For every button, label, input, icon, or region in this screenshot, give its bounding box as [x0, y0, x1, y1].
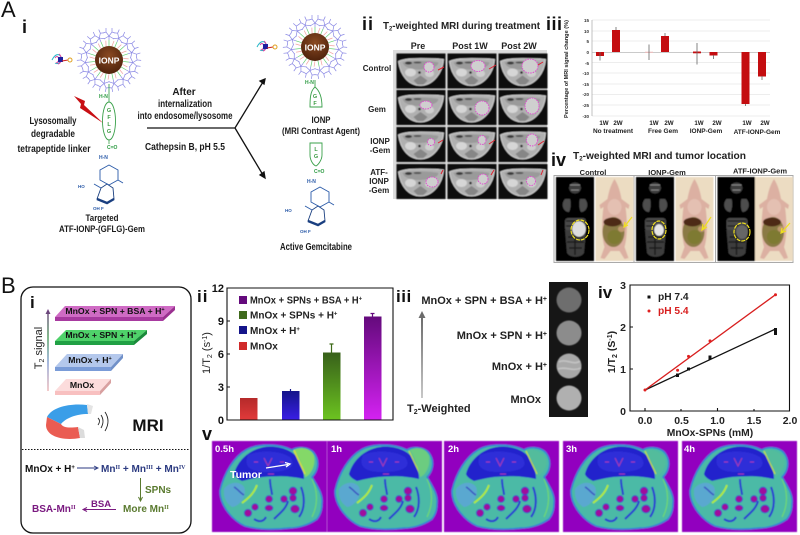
panel A-iii: signal change bar chart [546, 14, 781, 136]
y axis title: (s [201, 341, 213, 354]
label i: i [30, 293, 35, 312]
row labels: IONP [369, 177, 389, 186]
sample labels [421, 295, 547, 406]
image: 3h: 3h [566, 444, 577, 455]
Mn species: II [115, 465, 121, 471]
image frames [554, 175, 793, 262]
layer: H+ [55, 354, 123, 371]
tumor callout [230, 462, 290, 481]
label i: i [22, 17, 27, 37]
x labels groups: ATF-IONP-Gem [734, 129, 781, 136]
arrow: T2-weighted [418, 311, 426, 398]
error bars [600, 27, 762, 106]
tetrapeptide linker: L [107, 122, 111, 128]
x labels weeks: 1W [599, 120, 609, 127]
label v: v [202, 424, 212, 444]
y tick labels: 5 [586, 39, 589, 44]
legend [648, 292, 689, 317]
legend: + [334, 312, 338, 318]
panel box [21, 287, 191, 533]
image: 1h: 1h [331, 444, 342, 455]
column headers: Pre [411, 41, 425, 51]
conjugate caption: Targeted [86, 213, 119, 224]
y ticks: 12 [212, 283, 224, 295]
y tick labels: -30 [582, 114, 589, 119]
tetrapeptide linker: H-N [99, 94, 108, 100]
arrow: T2 signal [46, 309, 50, 391]
layer: H+: MnOx + H [68, 355, 109, 365]
layer: BSA: MnOx + SPN + BSA + H [65, 306, 161, 316]
heading: 2 [579, 156, 583, 162]
icon: active gemcitabine: OH F [300, 229, 311, 234]
heading: -weighted MRI during treatment [392, 21, 541, 32]
arrow label: T [407, 403, 414, 415]
y axis title: -1 [607, 334, 614, 341]
y ticks: 9 [218, 316, 224, 328]
y axis title: 2 [207, 354, 214, 358]
icon: magnet [46, 404, 93, 439]
image: 1h [327, 441, 442, 532]
y tick labels: -15 [582, 82, 589, 87]
BSA-Mn II: BSA-Mn [32, 504, 71, 515]
icon: signal waves [98, 412, 108, 431]
y ticks: 3 [620, 280, 626, 292]
layer: SPN: MnOx + SPN + H [65, 330, 133, 340]
GF fragment: H-N [305, 80, 314, 86]
label ii: ii [197, 287, 208, 306]
row labels: Control [363, 64, 391, 73]
arrow label: 2 [414, 409, 418, 416]
y ticks [620, 280, 626, 418]
series: pH 7.4 [645, 328, 777, 390]
column headers [411, 41, 537, 51]
icon: gemcitabine left: HO [78, 184, 85, 189]
image: 4h [682, 441, 797, 532]
group labels: Control [580, 168, 606, 177]
group labels: ATF-IONP-Gem [733, 166, 787, 176]
tetrapeptide linker: G [107, 108, 111, 114]
panel B-iv: relaxivity line plot [598, 280, 797, 439]
row labels: ATF- [370, 168, 388, 177]
row labels [363, 64, 391, 195]
image: 4h: 4h [684, 444, 695, 455]
layer: SPN [55, 330, 147, 345]
grid and axis [592, 20, 770, 116]
sample labels: MnOx [510, 394, 542, 406]
BSA label: BSA [91, 499, 111, 510]
equation: MnOx to Mn ions: MnOx + H [25, 464, 71, 475]
heading: T [383, 21, 389, 32]
Mn species: + Mn [153, 464, 179, 475]
x labels weeks: 2W [712, 120, 722, 127]
legend: MnOx [250, 342, 278, 352]
sample labels: MnOx + SPN + BSA + H [421, 295, 543, 307]
image: 2h [444, 441, 559, 532]
image: 0.5h [212, 441, 327, 532]
x labels weeks: 2W [613, 120, 623, 127]
heading: T [573, 151, 579, 162]
icon: active gemcitabine: H-N [307, 179, 316, 185]
Mn species: Mn [101, 464, 115, 475]
label iv: iv [551, 150, 566, 170]
icon: IONP dendrimer right: IONP [305, 42, 326, 52]
x ticks: 2.0 [783, 415, 797, 427]
y ticks: 3 [218, 382, 224, 394]
panel B-ii: relaxation rate bar chart [197, 283, 393, 427]
x labels weeks: 2W [760, 120, 770, 127]
Mn species: III [146, 465, 154, 471]
column headers: Post 2W [501, 41, 537, 51]
series: pH 5.4 [644, 293, 777, 392]
LG fragment [310, 143, 325, 175]
x labels weeks: 1W [694, 120, 704, 127]
reaction conditions text: Cathepsin B, pH 5.5 [145, 141, 225, 153]
legend [239, 296, 362, 352]
y axis title: -1 [202, 336, 209, 342]
reaction conditions text: into endosome/lysosome [138, 111, 233, 122]
y axis title: Percentage of MRI signal change (%) [564, 20, 570, 118]
layer: MnOx: MnOx [70, 380, 94, 390]
column headers: Post 1W [452, 41, 488, 51]
x ticks: 0.0 [638, 415, 652, 427]
GF fragment: F [313, 101, 317, 107]
conjugate caption: ATF-IONP-(GFLG)-Gem [59, 224, 145, 235]
icon: cleavage lightning [74, 96, 103, 123]
icon: IONP dendrimer left [77, 28, 141, 93]
sample labels: + [543, 362, 547, 369]
row labels: -Gem [370, 146, 390, 155]
x labels groups: Free Gem [648, 128, 678, 135]
phantom image [549, 282, 588, 417]
group labels: IONP-Gem [648, 168, 686, 177]
legend: MnOx + SPNs + H [250, 310, 334, 322]
y tick labels: -10 [582, 71, 589, 76]
row labels: IONP [370, 137, 390, 146]
GF fragment: G [313, 94, 317, 100]
arrow: to Mn ions [77, 466, 98, 470]
y axis title: ) [606, 331, 618, 334]
tetrapeptide linker: F [107, 115, 111, 121]
y tick labels [582, 18, 589, 119]
More Mn II: More Mn [123, 504, 164, 515]
T2 signal axis label: 2 [39, 358, 46, 362]
icon: ATF protein left [52, 54, 72, 64]
y ticks: 1 [620, 364, 626, 376]
y axis title: 1/T [201, 358, 213, 374]
y ticks: 6 [218, 349, 224, 361]
x labels groups: No treatment [593, 128, 634, 135]
panel B-iii: T2-weighted phantom [396, 282, 588, 417]
y ticks: 2 [620, 322, 626, 334]
layer: MnOx [55, 379, 111, 395]
LG fragment: G [314, 154, 318, 160]
sample labels: MnOx + SPN + H [457, 330, 543, 342]
LG fragment: C=O [314, 169, 325, 175]
x labels weeks: 1W [742, 120, 752, 127]
label iii: iii [546, 14, 563, 34]
layer: SPN: + [133, 331, 137, 337]
y tick labels: -20 [582, 92, 589, 97]
legend: + [296, 327, 300, 333]
tumor markers [571, 217, 790, 241]
y tick labels: 10 [584, 29, 589, 34]
icon: active gemcitabine: HO [285, 208, 292, 213]
bars [596, 30, 766, 104]
equation: MnOx to Mn ions: + [71, 465, 75, 471]
x labels groups: IONP-Gem [690, 128, 722, 135]
image: 3h [563, 441, 678, 532]
row labels: -Gem [369, 186, 389, 195]
linker caption: Lysosomally [30, 116, 77, 127]
GF fragment [305, 80, 322, 107]
MRI grid [393, 50, 548, 199]
x labels weeks [599, 120, 770, 127]
sample labels: MnOx + H [492, 361, 543, 373]
layer: H+: + [109, 356, 112, 362]
sample labels: + [543, 331, 547, 338]
label ii: ii [362, 14, 374, 34]
x ticks [638, 415, 797, 427]
arrow: forked reaction [147, 79, 265, 178]
label iv: iv [598, 283, 613, 302]
Mn species: IV [179, 465, 186, 471]
legend: + [359, 296, 362, 302]
x labels weeks: 1W [649, 120, 659, 127]
legend: MnOx + H [250, 326, 296, 337]
LG fragment: L [314, 147, 318, 153]
x labels groups [593, 128, 781, 136]
image: 2h: 2h [448, 444, 459, 455]
panel A-i: cleavage scheme [18, 15, 360, 253]
x axis title: MnOx-SPNs (mM) [667, 428, 753, 439]
y ticks: 0 [620, 406, 626, 418]
sample labels: + [543, 296, 547, 303]
legend: pH 7.4 [658, 292, 689, 303]
reaction conditions text: internalization [158, 99, 212, 110]
row labels: Gem [368, 105, 386, 114]
Mn species: + Mn [120, 464, 146, 475]
IONP caption: (MRI Contrast Agent) [282, 126, 360, 137]
y ticks: 0 [218, 415, 224, 427]
panel: B label: B [1, 273, 16, 298]
icon: IONP dendrimer right [283, 15, 347, 80]
T2 signal axis label: T [33, 362, 45, 369]
y tick labels: 15 [584, 18, 589, 23]
tetrapeptide linker: C=O [107, 145, 118, 151]
heading: 2 [389, 26, 393, 32]
T2 signal axis label: signal [33, 327, 45, 359]
y tick labels: -5 [585, 61, 589, 66]
More Mn II: II [164, 505, 169, 511]
bars [240, 314, 382, 420]
tumor callout: Tumor [230, 469, 262, 481]
icon: IONP dendrimer left: IONP [99, 56, 120, 66]
icon: gemcitabine left: OH F [93, 206, 104, 211]
BSA-Mn II: II [71, 505, 76, 511]
label iii: iii [396, 287, 412, 306]
arrow: SPNs [138, 478, 142, 501]
icon: gemcitabine left: H-N [99, 155, 108, 161]
panel A-iv: MRI and tumor location [551, 150, 793, 262]
tetrapeptide linker: G [107, 129, 111, 135]
plot frame [630, 285, 790, 411]
tetrapeptide linker [99, 84, 118, 151]
x ticks: 0.5 [674, 415, 689, 427]
reaction conditions text: After [172, 87, 196, 98]
arrow: BSA [83, 508, 116, 512]
linker caption: degradable [31, 129, 75, 140]
panel B-v: time-course MRI [202, 424, 797, 532]
linker caption: tetrapeptide linker [18, 144, 91, 155]
icon: ATF protein right [257, 41, 277, 51]
y axis title: (S [606, 341, 618, 354]
SPNs label: SPNs [145, 485, 172, 496]
x labels weeks: 2W [664, 120, 674, 127]
IONP caption: IONP [312, 115, 331, 126]
MRI label: MRI [132, 416, 164, 435]
active gemcitabine caption: Active Gemcitabine [280, 242, 352, 253]
legend: pH 5.4 [658, 306, 689, 317]
arrow label: -Weighted [418, 403, 471, 415]
chart frame [227, 288, 393, 420]
layer: BSA [55, 306, 175, 321]
y axis title: 2 [612, 354, 619, 358]
y tick labels: 0 [586, 50, 589, 55]
x ticks: 1.0 [710, 415, 725, 427]
layer: BSA: + [161, 307, 165, 313]
panel B-i: T2 signal scheme [21, 287, 191, 533]
x ticks: 1.5 [747, 415, 761, 427]
heading: -weighted MRI and tumor location [583, 151, 746, 162]
panel A-ii: MRI during treatment [362, 14, 548, 199]
image: 0.5h: 0.5h [215, 444, 234, 455]
legend: MnOx + SPNs + BSA + H [250, 296, 366, 306]
y axis title: ) [201, 332, 213, 336]
y ticks [212, 283, 224, 427]
icon: active gemcitabine [285, 179, 334, 234]
y axis title: 1/T [606, 358, 618, 373]
y tick labels: -25 [582, 103, 589, 108]
icon: gemcitabine left [78, 155, 123, 211]
group labels [580, 166, 787, 177]
